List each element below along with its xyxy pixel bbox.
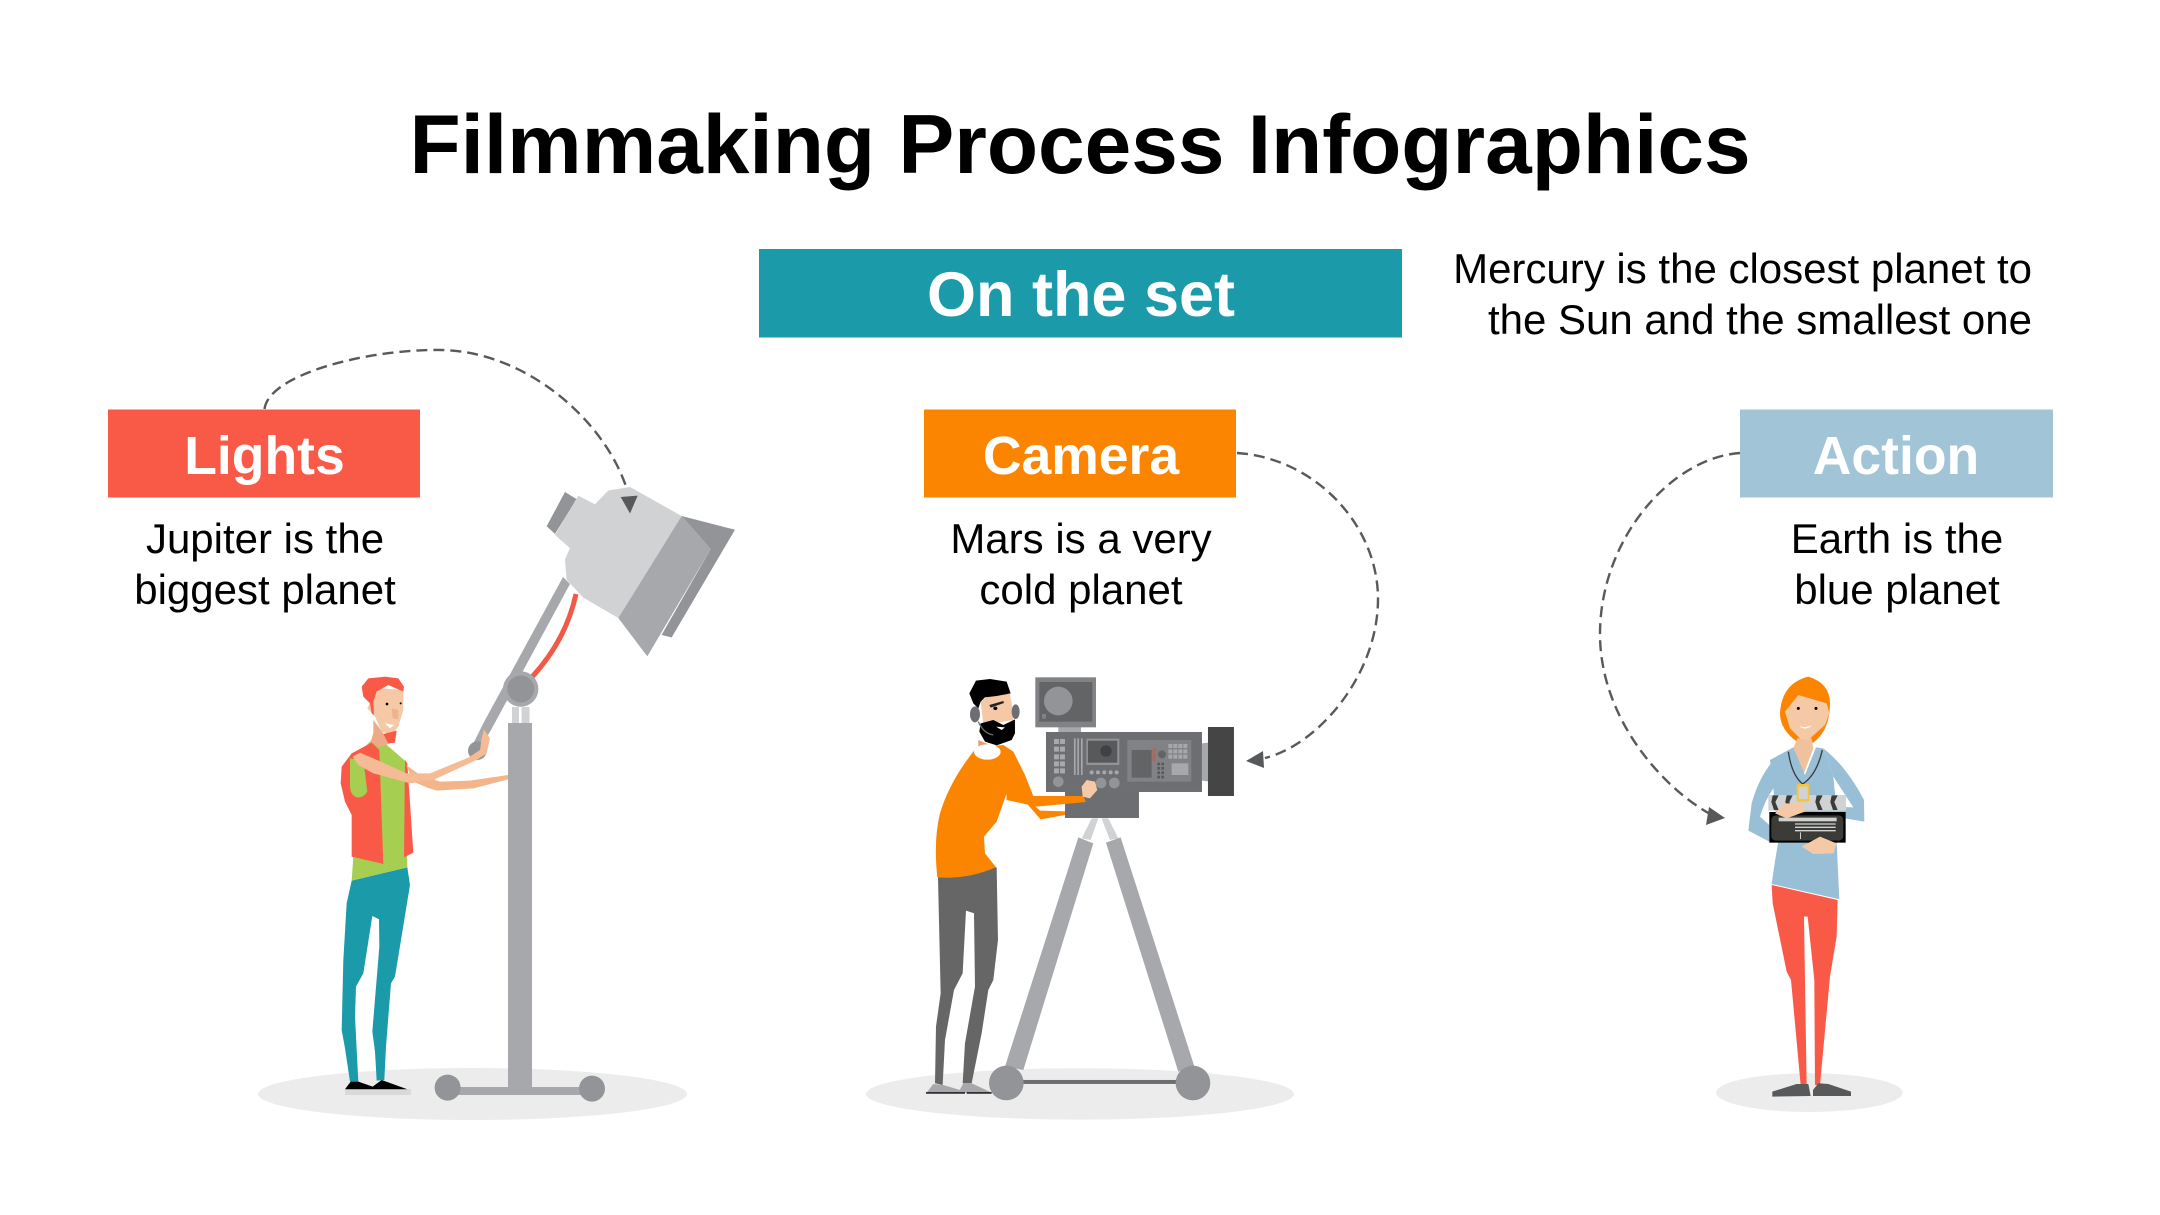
- label: Action: [1740, 410, 2053, 498]
- clapperboard: [1768, 795, 1846, 843]
- camera body: [1035, 677, 1234, 818]
- ground shadow: [866, 1068, 1294, 1120]
- ground shadow: [1716, 1073, 1903, 1112]
- label: Lights: Lights: [184, 427, 345, 486]
- lamp head: [547, 487, 735, 656]
- hands: [1775, 803, 1837, 854]
- arrowhead: [1246, 751, 1264, 768]
- panel: action: [1600, 410, 2053, 1112]
- lamp stand: [435, 577, 605, 1102]
- text: Earth: blue planet: [1794, 566, 2000, 613]
- arrow: action label to clapperboard: [1600, 453, 1740, 815]
- text: Jupiter: Jupiter is the: [146, 515, 384, 562]
- text: Jupiter: biggest planet: [134, 566, 396, 613]
- intro text: Mercury: the Sun and the smallest one: [1488, 296, 2032, 343]
- arrow: lights to lamp: [264, 350, 630, 500]
- panel: lights: [108, 350, 735, 1120]
- text: Earth: Earth is the: [1791, 515, 2003, 562]
- text: Mars: cold planet: [979, 566, 1183, 613]
- label: Action: Action: [1813, 427, 1979, 486]
- banner: On the set: [759, 249, 1402, 338]
- label: Camera: Camera: [983, 427, 1180, 486]
- illustration: lamp and technician: [258, 487, 735, 1120]
- banner: On the set: On the set: [927, 260, 1235, 330]
- technician: [341, 677, 508, 1095]
- text: Mars: Mars is a very: [950, 515, 1212, 562]
- arrowhead: [1706, 807, 1725, 825]
- arrow: camera label to camera: [1237, 453, 1378, 758]
- label: Camera: [924, 410, 1236, 498]
- label: Lights: [108, 410, 420, 498]
- camera operator: [926, 679, 1097, 1094]
- badge: [1797, 784, 1809, 802]
- intro text: Mercury: Mercury is the closest planet to: [1453, 245, 2032, 292]
- panel: camera: [866, 410, 1378, 1120]
- illustration: woman with clapperboard: [1716, 677, 1903, 1112]
- illustration: camera operator: [866, 677, 1294, 1120]
- title: Filmmaking Process Infographics: [409, 97, 1751, 191]
- tripod: [989, 818, 1210, 1100]
- woman: [1748, 677, 1864, 1097]
- arrowhead: lamp: [621, 496, 638, 514]
- ground shadow: [258, 1068, 687, 1120]
